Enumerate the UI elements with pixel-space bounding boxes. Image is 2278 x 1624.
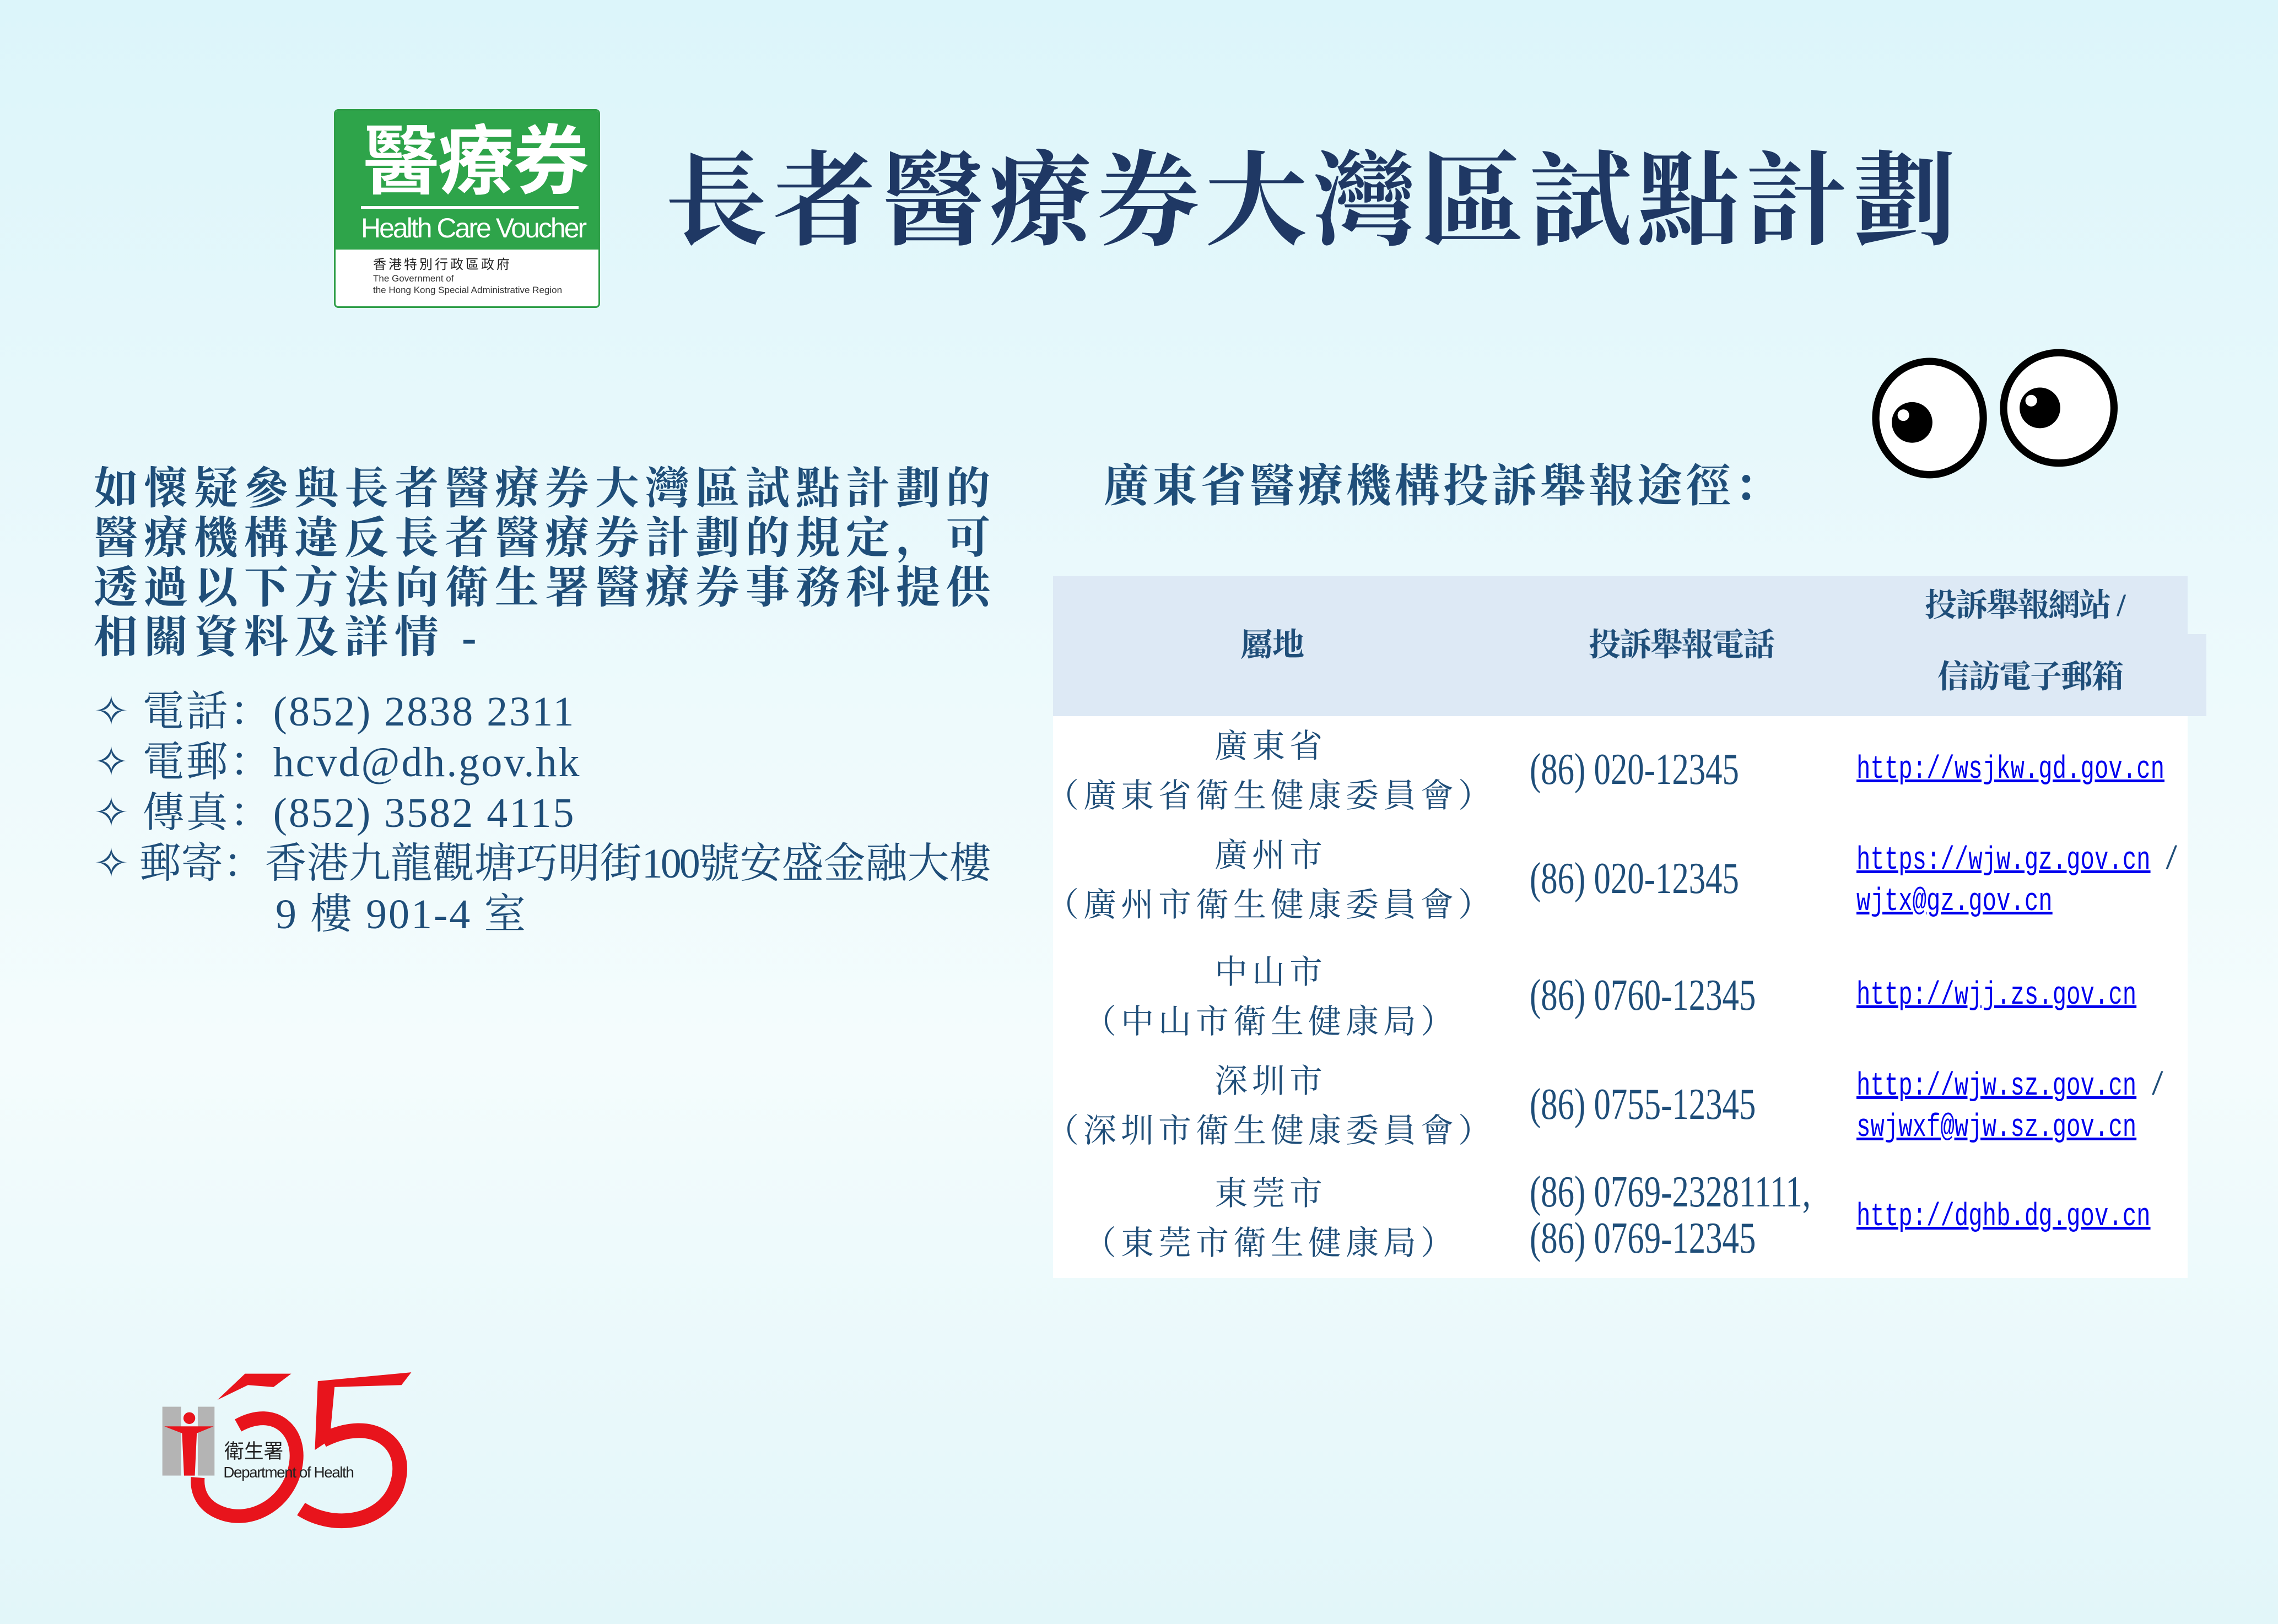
- logo green band: Health Care Voucher: [361, 213, 585, 243]
- row: zhongshan: http://wjj.zs.gov.cn: [1856, 978, 2136, 1014]
- logo: department of health 35: [162, 1372, 411, 1528]
- row: guangzhou: wjtx@gz.gov.cn: [1856, 884, 2053, 920]
- row: dongguan: http://dghb.dg.gov.cn: [1856, 1199, 2151, 1235]
- icon: googly eyes: [1872, 349, 2118, 478]
- logo green band: [336, 111, 598, 250]
- row: shenzhen: 深圳市: [1214, 1063, 1327, 1100]
- title: 長者醫療券大灣區試點計劃: [665, 119, 1961, 266]
- row: shenzhen: (86) 0755-12345: [1530, 1080, 1756, 1129]
- row: dongguan: [1083, 1168, 2151, 1263]
- row: guangzhou: 廣州市: [1214, 837, 1327, 874]
- row: shenzhen: http://wjw.sz.gov.cn /: [1856, 1069, 2164, 1105]
- logo government text: 香港特別行政區政府: [373, 253, 512, 273]
- contact list: 9 樓 901-4 室: [276, 891, 527, 938]
- table: [1053, 576, 2206, 1278]
- row: dongguan: （東莞市衛生健康局）: [1083, 1225, 1458, 1262]
- row: guangdong: 廣東省: [1214, 728, 1327, 765]
- row: guangzhou: (86) 020-12345: [1530, 854, 1739, 903]
- row: guangdong: [1046, 728, 2164, 814]
- row: guangdong: http://wsjkw.gd.gov.cn: [1856, 752, 2164, 788]
- intro paragraph: 醫療機構違反長者醫療券計劃的規定，可: [94, 515, 996, 563]
- logo: department of health 35: 衛生署: [224, 1436, 283, 1464]
- row: guangdong: (86) 020-12345: [1530, 745, 1739, 794]
- contact list: ✧ 電話：(852) 2838 2311: [94, 689, 575, 735]
- row: dongguan: 東莞市: [1214, 1176, 1327, 1212]
- table header: 信訪電子郵箱: [1937, 659, 2123, 695]
- table body: [1053, 716, 2188, 1278]
- row: guangzhou: （廣州市衛生健康委員會）: [1046, 887, 1496, 923]
- intro paragraph: 如懷疑參與長者醫療券大灣區試點計劃的: [94, 465, 996, 513]
- row: zhongshan: [1083, 954, 2137, 1040]
- header: location: 屬地: [1240, 627, 1304, 663]
- row: zhongshan: 中山市: [1214, 954, 1327, 990]
- header: phone: 投訴舉報電話: [1589, 627, 1774, 663]
- contact list: [94, 689, 991, 938]
- row: zhongshan: (86) 0760-12345: [1530, 971, 1756, 1020]
- row: shenzhen: （深圳市衛生健康委員會）: [1046, 1113, 1496, 1149]
- logo: department of health 35: Department of Health: [223, 1464, 353, 1481]
- row: shenzhen: [1046, 1063, 2164, 1149]
- logo: health care voucher: [334, 109, 600, 308]
- contact list: ✧ 電郵：hcvd@dh.gov.hk: [94, 739, 581, 786]
- right heading: 廣東省醫療機構投訴舉報途徑：: [1104, 461, 1783, 511]
- contact list: ✧ 傳真：(852) 3582 4115: [94, 790, 575, 836]
- row: guangzhou: [1046, 837, 2178, 923]
- intro paragraph: 相關資料及詳情 -: [94, 614, 483, 662]
- row: dongguan: (86) 0769-23281111,: [1530, 1168, 1811, 1216]
- intro paragraph: 透過以下方法向衛生署醫療券事務科提供: [94, 564, 996, 613]
- logo: health care voucher: the Hong Kong Special Administrative Region: [373, 285, 562, 295]
- row: guangdong: （廣東省衛生健康委員會）: [1046, 778, 1496, 814]
- header: website: 投訴舉報網站 /: [1925, 587, 2125, 623]
- intro paragraph: [94, 465, 996, 662]
- row: zhongshan: （中山市衛生健康局）: [1083, 1004, 1458, 1040]
- row: dongguan: (86) 0769-12345: [1530, 1214, 1756, 1263]
- logo: health care voucher: The Government of: [373, 273, 454, 284]
- table header: [1053, 576, 2188, 716]
- contact list: ✧ 郵寄：香港九龍觀塘巧明街100號安盛金融大樓: [94, 841, 991, 887]
- row: guangzhou: https://wjw.gz.gov.cn /: [1856, 843, 2178, 879]
- row: shenzhen: swjwxf@wjw.sz.gov.cn: [1856, 1110, 2136, 1146]
